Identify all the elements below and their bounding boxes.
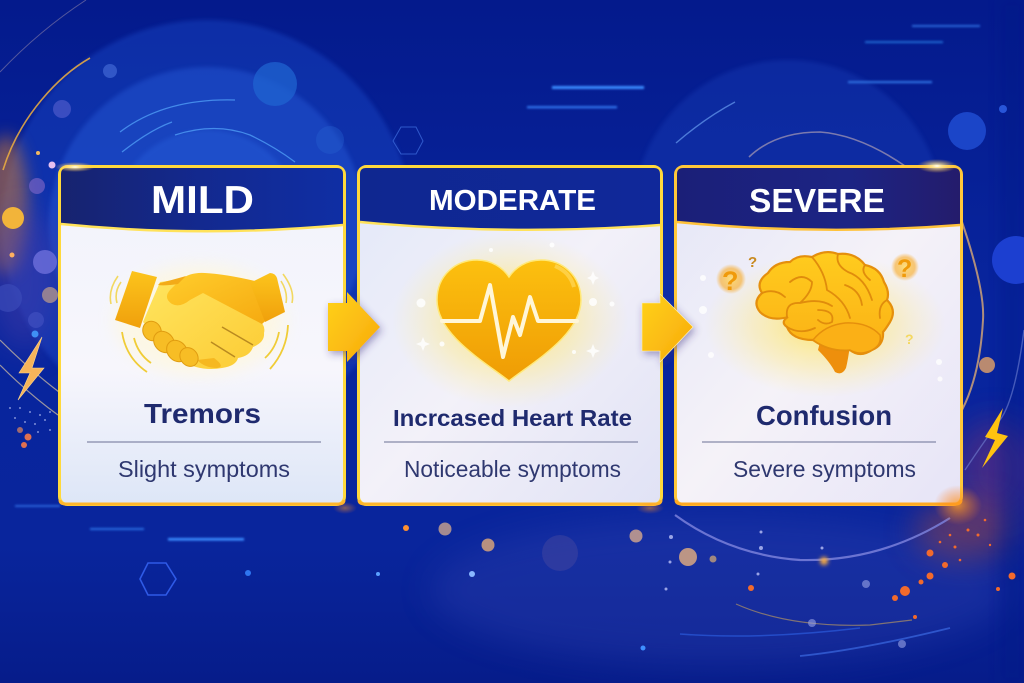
icon: shaking hands xyxy=(110,265,293,375)
description: severe symptoms: Severe symptoms xyxy=(733,456,916,482)
streaks xyxy=(15,25,980,541)
heading: mild: MILD xyxy=(151,179,254,222)
icon: lightning bolt left xyxy=(18,337,44,400)
description: noticeable symptoms: Noticeable symptoms xyxy=(404,456,621,482)
bokeh xyxy=(253,62,297,106)
icon: lightning bolt right xyxy=(982,408,1008,468)
icon: brain with question marks xyxy=(699,252,945,397)
panel: severe xyxy=(676,166,962,504)
icon: brain with question marks: ? xyxy=(748,254,757,271)
icon: brain with question marks: ? xyxy=(897,255,912,283)
symptom: confusion: Confusion xyxy=(756,400,892,431)
icon: brain with question marks: ? xyxy=(905,331,914,347)
symptom: increased heart rate: Incrcased Heart Rate xyxy=(393,405,632,431)
symptom: tremors: Tremors xyxy=(144,398,261,429)
rings xyxy=(0,0,86,72)
icon: brain with question marks: ? xyxy=(722,266,738,296)
icon: heart with pulse line xyxy=(392,232,628,408)
corner sparkles xyxy=(55,159,982,525)
arrow: mild to moderate xyxy=(328,292,380,362)
panel: moderate xyxy=(358,166,662,504)
panel: mild xyxy=(60,166,344,504)
arrow: moderate to severe xyxy=(642,294,693,362)
heading: severe: SEVERE xyxy=(749,182,885,219)
hexagons xyxy=(393,127,423,154)
heading: moderate: MODERATE xyxy=(429,185,596,217)
description: slight symptoms: Slight symptoms xyxy=(118,456,290,482)
